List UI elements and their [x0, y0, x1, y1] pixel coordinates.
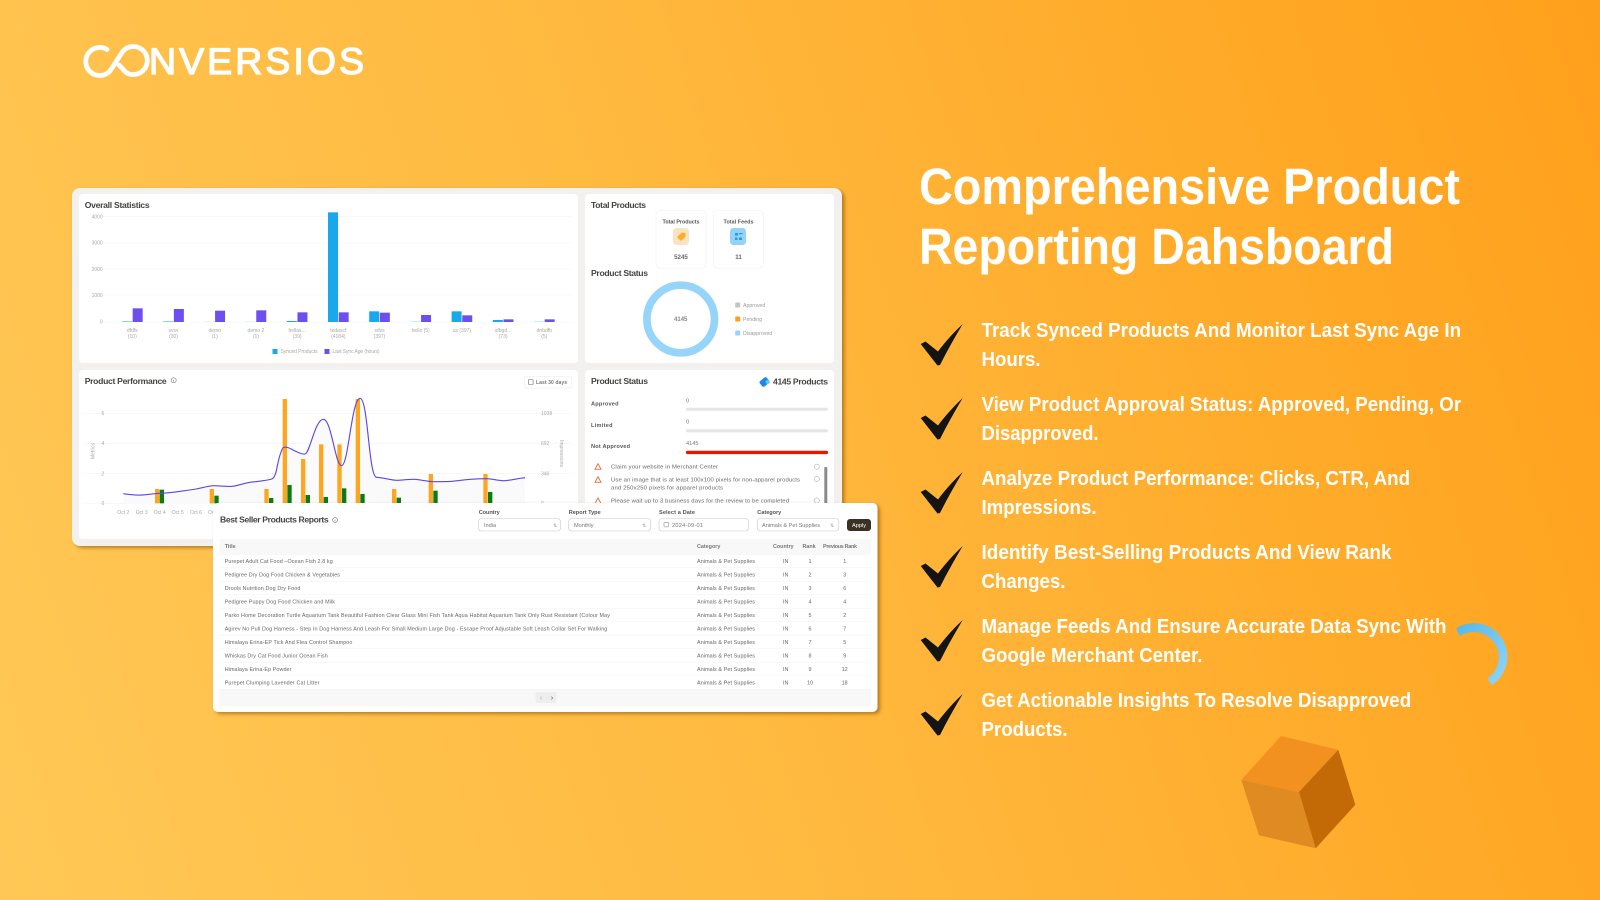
feature: manage feeds: Manage Feeds And Ensure Accurate Data Sync With: [982, 615, 1446, 638]
table: best seller products: IN: [783, 680, 788, 686]
combo chart: metrics and impressions: Metrics: [90, 442, 96, 459]
table: best seller products: Animals & Pet Supplies: [697, 586, 755, 592]
heading: product status: Product Status: [591, 376, 648, 386]
issue list: [595, 464, 827, 505]
combo chart: metrics and impressions: 2: [102, 472, 104, 478]
table: best seller products: Rank: [802, 544, 816, 550]
combo chart: metrics and impressions: [85, 398, 571, 516]
decoration: orange cube: [1241, 736, 1355, 848]
filter: category: [757, 510, 839, 531]
bar chart: synced products and last sync age: (73): [499, 334, 508, 340]
filter: country: Country: [479, 510, 501, 516]
logo: Conversios: NVERSIOS: [149, 40, 364, 82]
feature: analyze product performance: Analyze Product Performance: Clicks, CTR, And: [982, 467, 1410, 490]
combo chart: metrics and impressions: 0: [541, 501, 544, 507]
panel: product performance: [79, 370, 578, 539]
status rows: Not Approved: [591, 444, 631, 450]
table: best seller products: Previous Rank: [823, 544, 857, 550]
table: best seller products: 3: [843, 572, 846, 578]
filter: country: ⇅: [553, 523, 557, 529]
filter: select a date: [659, 510, 748, 531]
table: best seller products: 7: [843, 626, 846, 632]
legend: product status: Disapproved: [743, 331, 772, 337]
feature: track synced products: Hours.: [982, 348, 1040, 371]
table: best seller products: Animals & Pet Supplies: [697, 667, 755, 673]
bar chart: synced products and last sync age: hellas...: [288, 328, 306, 334]
bar chart: synced products and last sync age: svsv: [168, 328, 179, 334]
filter: category: Animals & Pet Supplies: [762, 523, 820, 529]
status rows: 0: [686, 398, 689, 404]
card: total feeds: 11: [735, 254, 742, 261]
combo chart: metrics and impressions: 346: [541, 472, 550, 478]
card: total feeds: [714, 211, 764, 268]
table: best seller products: 9: [808, 667, 812, 673]
bar chart: synced products and last sync age: (1): [253, 334, 259, 340]
combo chart: metrics and impressions: Oct 6: [190, 510, 202, 516]
combo chart: metrics and impressions: Oct 5: [172, 510, 184, 516]
table: best seller products: Himalaya Erina-EP Tick And Flea Control Shampoo: [225, 640, 352, 646]
feature: view product approval status: Disapproved.: [982, 422, 1098, 445]
button: last 30 days: [524, 376, 572, 388]
bar chart: synced products and last sync age: sfbgd...: [495, 328, 511, 334]
table: best seller products: Animals & Pet Supplies: [697, 600, 755, 606]
filter: select a date: Select a Date: [659, 510, 695, 516]
table: best seller products: IN: [783, 626, 788, 632]
table: best seller products: 1: [808, 559, 812, 565]
table: best seller products: Country: [773, 544, 794, 550]
table: best seller products: IN: [783, 600, 788, 606]
filter: category: Category: [757, 510, 782, 516]
panel: best seller products reports: [213, 503, 878, 712]
feature: track synced products: [921, 319, 1461, 371]
table: best seller products: Pedigree Puppy Dog Food Chicken and Milk: [225, 600, 335, 606]
button: apply: Apply: [852, 523, 866, 529]
filter: country: India: [484, 523, 497, 529]
legend: overall statistics: Last Sync Age (hours): [332, 349, 380, 355]
filter: report type: ⇅: [642, 523, 646, 529]
feature: manage feeds: [921, 615, 1446, 667]
feature list: [921, 319, 1461, 741]
card: total feeds: Total Feeds: [724, 220, 754, 226]
bar chart: synced products and last sync age: (10): [128, 334, 137, 340]
feature: track synced products: Track Synced Products And Monitor Last Sync Age In: [982, 319, 1461, 342]
feature: identify best-selling products: Identify Best-Selling Products And View Rank: [982, 541, 1392, 564]
combo chart: metrics and impressions: 0: [102, 501, 104, 507]
table: best seller products: IN: [783, 654, 788, 660]
table: best seller products: 18: [842, 680, 848, 686]
table: best seller products: Animals & Pet Supplies: [697, 572, 755, 578]
bar chart: synced products and last sync age: (397): [374, 334, 386, 340]
table: best seller products: 4: [843, 600, 846, 606]
table: best seller products: IN: [783, 572, 788, 578]
title: Reporting Dahsboard: [919, 218, 1394, 275]
title: [919, 158, 1460, 275]
status rows: 0: [686, 420, 689, 426]
table: best seller products: Whiskas Dry Cat Food Junior Ocean Fish: [225, 654, 328, 660]
bar chart: synced products and last sync age: demo: [208, 328, 221, 334]
combo chart: metrics and impressions: Oct 2: [117, 510, 129, 516]
table: best seller products: Agirev No Pull Dog Harness - Step In Dog Harness And Leash For Small Medium Large Dog - Escape Proof Adjustable Soft Leash Collar Set For Walking: [225, 626, 607, 632]
status rows: 4145: [686, 441, 698, 447]
table: best seller products: [219, 539, 871, 689]
button: last 30 days: Last 30 days: [536, 380, 567, 386]
bar chart: synced products and last sync age: 0: [100, 320, 103, 326]
heading: product performance: Product Performance: [85, 376, 167, 386]
table: best seller products: 2: [808, 572, 812, 578]
combo chart: metrics and impressions: 4: [102, 441, 104, 447]
combo chart: metrics and impressions: Impressions: [558, 440, 564, 467]
icon: product tag: [759, 376, 771, 388]
card: total products: Total Products: [662, 220, 700, 226]
feature: identify best-selling products: Changes.: [982, 570, 1066, 593]
bar chart: synced products and last sync age: us (397): [453, 328, 471, 334]
heading: product status: Product Status: [591, 268, 648, 278]
table: best seller products: Pedigree Dry Dog Food Chicken & Vegetables: [225, 572, 340, 578]
feature: actionable insights: [921, 689, 1411, 741]
issue list: Use an image that is at least 100x100 pixels for non-apparel products: [611, 477, 800, 483]
table: best seller products: IN: [783, 667, 788, 673]
legend: overall statistics: Synced Products: [280, 349, 318, 355]
table: best seller products: 2: [843, 613, 846, 619]
bar chart: synced products and last sync age: demo 2: [248, 328, 264, 334]
heading: overall statistics: Overall Statistics: [85, 200, 150, 210]
table: best seller products: Animals & Pet Supplies: [697, 626, 755, 632]
bar chart: synced products and last sync age: 2000: [92, 267, 103, 273]
bar chart: synced products and last sync age: dfdfs: [127, 328, 138, 334]
feature: view product approval status: View Product Approval Status: Approved, Pending, Or: [982, 393, 1461, 416]
feature: view product approval status: [921, 393, 1461, 445]
decoration: blue arc: [1456, 623, 1507, 685]
legend: product status: [735, 302, 772, 337]
feature: manage feeds: Google Merchant Center.: [982, 644, 1202, 667]
feature: analyze product performance: [921, 467, 1410, 519]
legend: product status: Pending: [743, 317, 762, 323]
table: best seller products: 6: [808, 626, 812, 632]
table footer with pagination: [219, 690, 871, 706]
status rows: [591, 398, 828, 454]
issue list: Claim your website in Merchant Center: [611, 464, 718, 470]
table: best seller products: Animals & Pet Supplies: [697, 654, 755, 660]
panel: product status breakdown: [585, 370, 834, 539]
status rows: Approved: [591, 402, 619, 408]
combo chart: metrics and impressions: 692: [541, 441, 550, 447]
bar chart: synced products and last sync age: 1000: [92, 293, 103, 299]
table: best seller products: 9: [843, 654, 846, 660]
heading: best seller products reports: Best Seller Products Reports: [220, 514, 329, 524]
feature: actionable insights: Get Actionable Insights To Resolve Disapproved: [982, 689, 1411, 712]
filter: report type: Monthly: [574, 523, 594, 529]
donut chart: product status: [647, 285, 714, 353]
panel: total products and product status donut: [585, 194, 834, 363]
bar chart: synced products and last sync age: tedascf: [330, 328, 347, 334]
heading: total products: Total Products: [591, 200, 646, 210]
table: best seller products: Title: [225, 544, 236, 550]
card: total products: [656, 211, 706, 268]
table footer with pagination: ›: [551, 695, 554, 702]
table: best seller products: IN: [783, 559, 788, 565]
combo chart: metrics and impressions: Oct 4: [154, 510, 166, 516]
table: best seller products: 1: [843, 559, 846, 565]
table: best seller products: 3: [808, 586, 812, 592]
bar chart: synced products and last sync age: 4000: [92, 214, 103, 220]
table: best seller products: 7: [808, 640, 812, 646]
filter: report type: Report Type: [569, 510, 601, 516]
donut chart: product status: 4145: [674, 317, 688, 323]
table: best seller products: Animals & Pet Supplies: [697, 559, 755, 565]
bar chart: synced products and last sync age: sdvs: [374, 328, 385, 334]
panel: dashboard screenshot: [72, 188, 842, 546]
bar chart: synced products and last sync age: hello (5): [412, 328, 430, 334]
table: best seller products: Parko Home Decoration Turtle Aquarium Tank Beautiful Fashion Clear Glass Mini Fish Tank Aqua Habitat Aquarium Tank Only Rust Resistant (Colour May: [225, 613, 610, 619]
bar chart: synced products and last sync age: (30): [169, 334, 178, 340]
issue list: Please wait up to 3 business days for the review to be completed: [611, 498, 789, 504]
combo chart: metrics and impressions: 6: [102, 411, 104, 417]
feature: actionable insights: Products.: [982, 718, 1068, 741]
bar chart: synced products and last sync age: (5): [541, 334, 548, 340]
table: best seller products: 4: [808, 600, 812, 606]
button: apply: [847, 519, 871, 531]
filter: select a date: 2024-09-01: [672, 523, 703, 529]
total: 4145 products: 4145 Products: [773, 376, 828, 386]
table: best seller products: Himalaya Erina-Ep Powder: [225, 667, 292, 673]
table: best seller products: Category: [697, 544, 720, 550]
table footer with pagination: ‹: [540, 695, 543, 702]
table: best seller products: 5: [808, 613, 812, 619]
table: best seller products: IN: [783, 613, 788, 619]
table: best seller products: Purepet Adult Cat Food –Ocean Fish 2.8 kg: [225, 559, 333, 565]
table: best seller products: 6: [843, 586, 846, 592]
icon: info: [333, 518, 337, 522]
table: best seller products: Animals & Pet Supplies: [697, 680, 755, 686]
bar chart: synced products and last sync age: (1): [212, 334, 218, 340]
issue list: and 250x250 pixels for apparel products: [611, 486, 723, 492]
card: total products: 5245: [674, 254, 688, 261]
status rows: Limited: [591, 423, 613, 429]
table: best seller products: Purepet Clumping Lavender Cat Litter: [225, 680, 320, 686]
bar chart: synced products and last sync age: dnbdfb: [537, 328, 552, 334]
bar chart: synced products and last sync age: 3000: [92, 240, 103, 246]
filter: report type: [569, 510, 651, 531]
combo chart: metrics and impressions: 1038: [541, 411, 552, 417]
table: best seller products: 12: [842, 667, 848, 673]
feature: identify best-selling products: [921, 541, 1392, 593]
table: best seller products: IN: [783, 640, 788, 646]
bar chart: synced products and last sync age: (4184): [331, 334, 346, 340]
legend: product status: Approved: [743, 303, 765, 309]
combo chart: metrics and impressions: Oct 7: [208, 510, 220, 516]
title: Comprehensive Product: [919, 158, 1460, 215]
table: best seller products: 5: [843, 640, 846, 646]
filter: category: ⇅: [830, 523, 834, 529]
table: best seller products: IN: [783, 586, 788, 592]
filter: country: [478, 510, 560, 531]
panel: overall statistics: [79, 194, 578, 363]
combo chart: metrics and impressions: Oct 3: [136, 510, 148, 516]
table: best seller products: 10: [807, 680, 813, 686]
table: best seller products: Animals & Pet Supplies: [697, 613, 755, 619]
icon: info: [171, 378, 176, 383]
table: best seller products: Animals & Pet Supplies: [697, 640, 755, 646]
table: best seller products: 8: [808, 654, 812, 660]
feature: analyze product performance: Impressions.: [982, 496, 1096, 519]
table: best seller products: Drools Nutrition Dog Dry Food: [225, 586, 300, 592]
bar chart: synced products and last sync age: [92, 212, 572, 340]
bar chart: synced products and last sync age: (39): [293, 334, 302, 340]
legend: overall statistics: [272, 349, 380, 355]
